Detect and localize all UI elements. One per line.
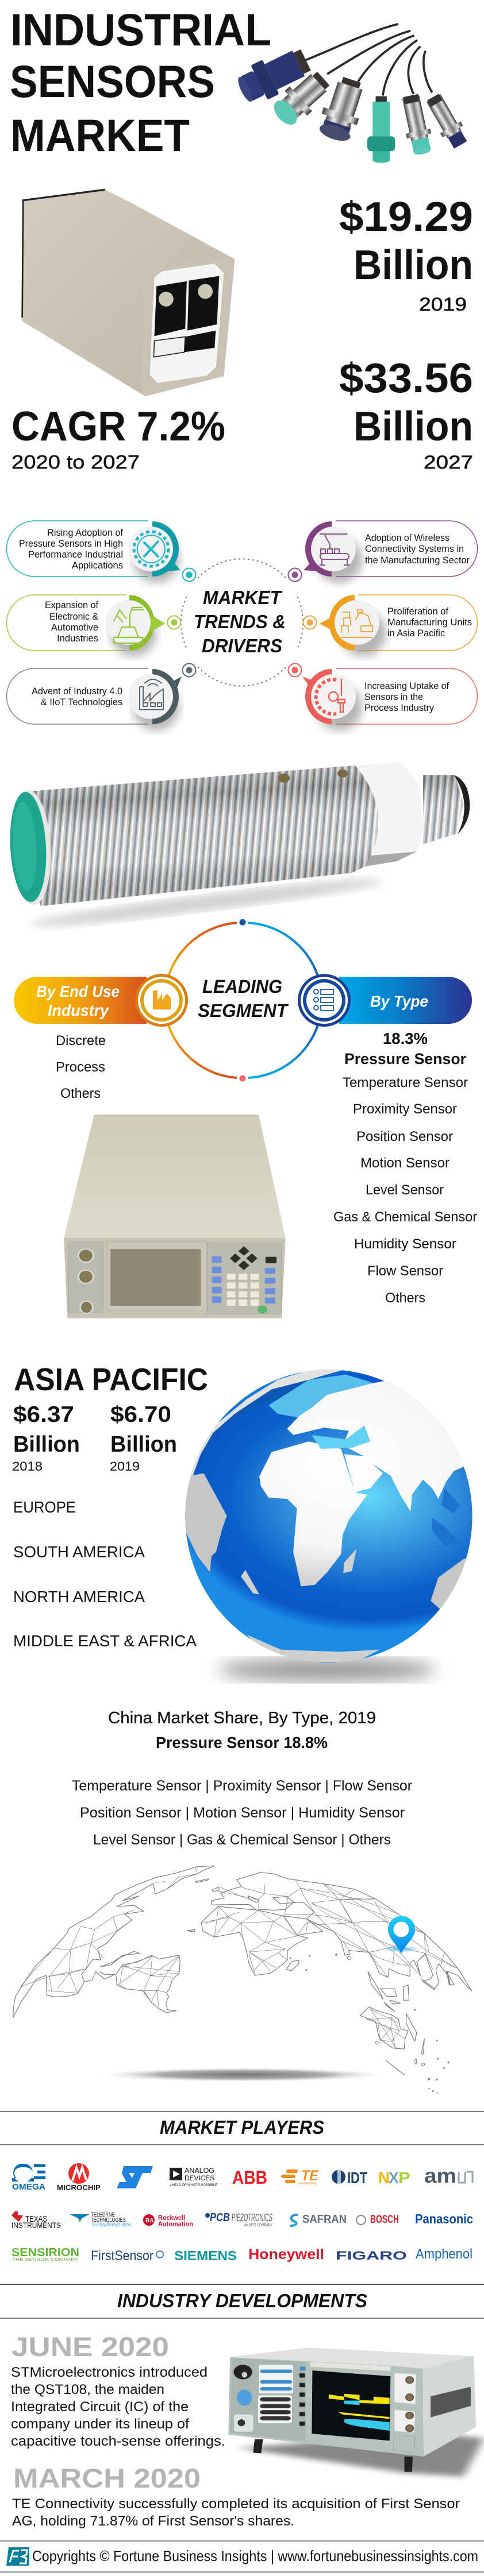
logo: rockwell automation [143, 2214, 193, 2228]
list: sensor types [333, 1030, 477, 1306]
title: INDUSTRIAL [10, 4, 271, 55]
stat: 2027 market size [339, 355, 473, 473]
panel: company logos [11, 2163, 473, 2264]
image: signal analyzer instrument [228, 2347, 484, 2477]
text block: march 2020: TE Connectivity successfully completed its acquisition of First Sensor [12, 2496, 460, 2512]
text block: june 2020: Integrated Circuit (IC) of the [11, 2399, 189, 2415]
card: process industry: Sensors in the [364, 692, 423, 702]
logo: analog devices [170, 2167, 217, 2187]
chart: wireframe world map [13, 1866, 472, 2094]
list: sensor types: Position Sensor [356, 1129, 453, 1144]
logo: abb: ABB [232, 2167, 267, 2188]
logo: teledyne: TELEDYNE [91, 2212, 115, 2218]
logo: pcb piezotronics: PCB [210, 2211, 230, 2224]
card: process industry: Increasing Uptake of [364, 681, 449, 691]
icon: location pin [382, 1916, 421, 1954]
logo: nxp: X [389, 2169, 399, 2187]
card: electronic and automotive: Industries [57, 633, 98, 644]
heading: industry developments: INDUSTRY DEVELOPMENTS [117, 2290, 367, 2311]
heading: leading segment [198, 976, 289, 1021]
logo: sensirion: SENSIRION [11, 2246, 79, 2259]
text block: china sensor types: Level Sensor | Gas & Chemical Sensor | Others [93, 1832, 391, 1848]
stat: 2019 value: 2019 [110, 1459, 140, 1473]
text block: june 2020: STMicroelectronics introduced [11, 2365, 208, 2380]
stat: 2027 market size: 2027 [424, 452, 473, 473]
icon: blue globe [185, 1369, 473, 1681]
text block: china sensor types: Temperature Sensor | Proximity Sensor | Flow Sensor [72, 1778, 412, 1794]
stat: 2019 value [110, 1402, 177, 1473]
logo: texas instruments: INSTRUMENTS [11, 2221, 61, 2230]
list: sensor types: 18.3% [383, 1030, 428, 1047]
logo: pcb piezotronics: PIEZOTRONICS [232, 2212, 272, 2223]
text block: march 2020: MARCH 2020 [13, 2463, 201, 2493]
stat: CAGR: 2020 to 2027 [11, 451, 140, 473]
stat: CAGR: CAGR 7.2% [11, 404, 225, 450]
text block: june 2020: the QST108, the maiden [11, 2382, 164, 2397]
card: asia pacific manufacturing: Proliferation of [387, 606, 448, 617]
card: pressure sensors: Applications [72, 560, 123, 571]
list: sensor types: Gas & Chemical Sensor [333, 1209, 477, 1225]
image: beige measuring instrument [64, 1115, 286, 1318]
heading: leading segment: SEGMENT [198, 1000, 289, 1021]
stat: 2019 market size [339, 194, 473, 315]
card: process industry [289, 664, 477, 730]
card: electronic and automotive: Automotive [51, 622, 98, 633]
logo: honeywell: Honeywell [248, 2246, 324, 2262]
dotted ring [181, 559, 303, 686]
text block: june 2020 [11, 2331, 225, 2449]
logo: analog devices: DEVICES [185, 2174, 214, 2182]
tag: by type: By Type [370, 992, 428, 1010]
logo: te connectivity: TE [301, 2168, 319, 2184]
logo: analog devices: AHEAD OF WHAT'S POSSIBLE [170, 2184, 217, 2187]
logo: rockwell automation: Rockwell [158, 2214, 185, 2222]
logo: ams [424, 2164, 473, 2187]
card: process industry: Process Industry [364, 703, 435, 713]
logo: pcb piezotronics: AN MTS COMPANY [244, 2223, 272, 2227]
image: six proximity sensors with cables [233, 24, 471, 163]
heading: market players: MARKET PLAYERS [160, 2117, 324, 2138]
image: beige relay sensor box [22, 189, 235, 396]
stat: 2027 market size: $33.56 [339, 355, 473, 401]
panel: market trends and drivers [6, 521, 477, 730]
heading: market trends and drivers: TRENDS & [194, 611, 286, 632]
stat: 2019 value: Billion [110, 1432, 177, 1457]
logo: microchip: MICROCHIP [57, 2183, 101, 2192]
list: other regions: NORTH AMERICA [13, 1588, 145, 1606]
card: asia pacific manufacturing: Manufacturing Units [387, 617, 472, 628]
card: asia pacific manufacturing [304, 595, 477, 656]
card: pressure sensors: Rising Adoption of [47, 528, 123, 538]
heading: market trends and drivers: DRIVERS [202, 635, 282, 656]
list: sensor types: Others [385, 1290, 425, 1306]
stat: 2018 value [12, 1402, 80, 1473]
heading: market trends and drivers: MARKET [203, 587, 283, 608]
logo: bosch [356, 2214, 399, 2226]
list: end use: Discrete [56, 1033, 106, 1049]
logo: te connectivity: connectivity [298, 2182, 316, 2186]
text block: march 2020 [12, 2463, 460, 2529]
logo: amphenol: Amphenol [416, 2246, 473, 2262]
logo: first sensor: FirstSensor [91, 2248, 153, 2264]
text block: china sensor types [72, 1778, 412, 1848]
heading: china market share [108, 1709, 376, 1751]
text block: march 2020: AG, holding 71.87% of First Sensor's shares. [12, 2513, 294, 2529]
stat: 2019 market size: Billion [354, 242, 473, 288]
logo: idt [332, 2169, 367, 2187]
list: sensor types: Motion Sensor [360, 1155, 450, 1171]
logo: sensirion: THE SENSOR COMPANY [12, 2258, 79, 2262]
card: wireless connectivity: Connectivity Systems in [365, 544, 464, 554]
list: sensor types: Pressure Sensor [344, 1050, 466, 1067]
stat: 2018 value: $6.37 [13, 1402, 74, 1427]
logo: figaro: FIGARO [336, 2249, 407, 2262]
card: industry 4.0: & IIoT Technologies [41, 697, 122, 707]
text block: china sensor types: Position Sensor | Motion Sensor | Humidity Sensor [80, 1805, 405, 1821]
logo: microchip [57, 2163, 101, 2192]
card: wireless connectivity: the Manufacturing Sector [365, 555, 470, 566]
list: sensor types: Temperature Sensor [343, 1075, 468, 1090]
title: MARKET [10, 110, 190, 161]
list: end use: Process [56, 1059, 105, 1075]
stat: 2018 value: 2018 [12, 1459, 43, 1473]
title [10, 4, 271, 161]
logo: bosch: BOSCH [370, 2214, 399, 2226]
card: electronic and automotive: Electronic & [49, 612, 98, 622]
icon: fortune business insights logo [6, 2547, 29, 2566]
logo: rockwell automation: RA [145, 2218, 153, 2224]
text block: june 2020: capacitive touch-sense offerings. [11, 2434, 225, 2449]
logo: safran: SAFRAN [302, 2213, 347, 2226]
list: sensor types: Humidity Sensor [354, 1236, 456, 1252]
list: sensor types: Flow Sensor [367, 1263, 443, 1279]
logo: omega: OMEGA [12, 2182, 45, 2192]
logo: rockwell automation: Automation [158, 2220, 193, 2228]
card: pressure sensors [6, 521, 195, 583]
logo: nxp [378, 2169, 410, 2187]
logo: idt: IDT [347, 2169, 367, 2187]
list: sensor types: Proximity Sensor [353, 1101, 457, 1117]
logo: teledyne [70, 2212, 131, 2227]
card: pressure sensors: Pressure Sensors in High [19, 539, 123, 549]
list: end use: Others [60, 1086, 101, 1101]
list: sensor types: Level Sensor [366, 1182, 444, 1198]
tag: by end use industry [14, 974, 188, 1027]
card: industry 4.0 [6, 664, 195, 730]
logo: texas instruments [11, 2211, 61, 2230]
stat: CAGR [11, 404, 225, 473]
panel: regional [12, 1362, 208, 1650]
card: asia pacific manufacturing: in Asia Pacific [387, 628, 445, 639]
tag: by end use industry: By End Use [36, 983, 120, 1000]
logo: teledyne: Everywhereyoulook [92, 2222, 131, 2227]
stat: 2019 value: $6.70 [110, 1402, 171, 1427]
list: other regions: EUROPE [13, 1498, 76, 1516]
logo: panasonic: Panasonic [415, 2211, 473, 2226]
heading: china market share: Pressure Sensor 18.8% [156, 1734, 328, 1751]
text block: june 2020: JUNE 2020 [11, 2331, 169, 2362]
logo: teledyne: TECHNOLOGIES [91, 2217, 126, 2223]
logo: nxp: N [378, 2169, 390, 2187]
stat: 2027 market size: Billion [354, 404, 473, 450]
card: pressure sensors: Performance Industrial [28, 550, 123, 560]
logo: ams: am [424, 2164, 456, 2187]
card: wireless connectivity: Adoption of Wireless [365, 533, 450, 543]
stat: 2019 market size: 2019 [419, 294, 467, 315]
logo: analog devices: ANALOG [185, 2167, 214, 2175]
logo: texas instruments: TEXAS [25, 2214, 47, 2224]
stat: 2019 market size: $19.29 [339, 194, 473, 240]
card: wireless connectivity [289, 521, 477, 583]
list: other regions [13, 1498, 197, 1650]
logo: pcb piezotronics [205, 2211, 272, 2227]
card: electronic and automotive: Expansion of [45, 600, 98, 610]
tag: by end use industry: Industry [48, 1001, 109, 1019]
heading: asia pacific: ASIA PACIFIC [14, 1362, 208, 1397]
logo: omega [12, 2164, 45, 2192]
list: other regions: SOUTH AMERICA [13, 1543, 145, 1561]
image: threaded cylindrical sensor [7, 762, 470, 933]
card: industry 4.0: Advent of Industry 4.0 [32, 686, 122, 697]
logo: st [117, 2166, 153, 2188]
list: other regions: MIDDLE EAST & AFRICA [13, 1632, 197, 1650]
text block: june 2020: company under its lineup of [11, 2416, 189, 2432]
logo: nxp: P [398, 2169, 410, 2187]
stat: 2018 value: Billion [13, 1432, 80, 1457]
heading: market trends and drivers [194, 587, 286, 656]
heading: leading segment: LEADING [202, 976, 282, 997]
list: end use [56, 1033, 106, 1101]
panel: leading segment [14, 919, 477, 1306]
tag: by type [298, 974, 472, 1027]
card: electronic and automotive [6, 595, 180, 656]
title: SENSORS [10, 56, 215, 107]
logo: te connectivity [281, 2168, 319, 2186]
logo: siemens: SIEMENS [174, 2248, 237, 2263]
heading: china market share: China Market Share, By Type, 2019 [108, 1709, 376, 1727]
segment ring [168, 923, 318, 1078]
